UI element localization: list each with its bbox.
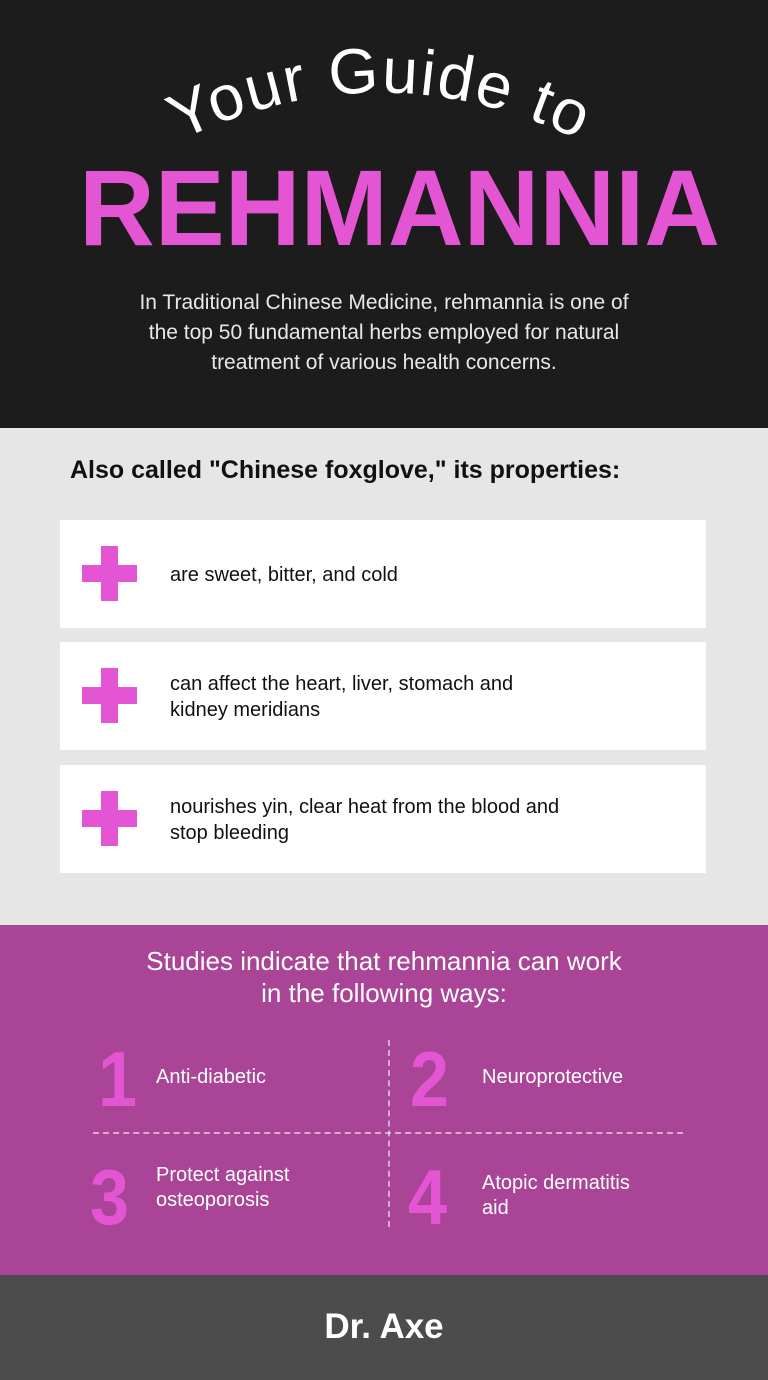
card 3: stop bleeding	[170, 822, 289, 844]
item 1	[98, 1035, 266, 1123]
item 2: Neuroprotective	[482, 1066, 623, 1088]
item 3: 3	[90, 1153, 129, 1241]
intro text: In Traditional Chinese Medicine, rehmannia is one of	[139, 291, 629, 314]
heading: Also called "Chinese foxglove," its properties:	[70, 456, 620, 484]
title	[79, 48, 720, 260]
header panel	[0, 0, 768, 428]
item 4: Atopic dermatitis	[482, 1172, 630, 1194]
intro text: the top 50 fundamental herbs employed for natural	[149, 321, 619, 344]
item 3: osteoporosis	[156, 1189, 269, 1211]
intro text: treatment of various health concerns.	[211, 351, 557, 374]
item 1: 1	[98, 1035, 137, 1123]
item 3: Protect against	[156, 1164, 289, 1186]
heading: in the following ways:	[261, 978, 507, 1008]
panel: properties	[0, 428, 768, 925]
heading: Studies indicate that rehmannia can work	[146, 946, 622, 976]
logo: Dr. Axe	[324, 1307, 444, 1346]
intro text	[139, 291, 629, 374]
item 2	[410, 1035, 623, 1123]
item 4	[408, 1153, 630, 1241]
item 3	[90, 1153, 290, 1241]
card 1	[60, 520, 706, 628]
card 2: can affect the heart, liver, stomach and	[170, 673, 513, 695]
item 4: aid	[482, 1197, 509, 1219]
card 3	[60, 765, 706, 873]
footer	[0, 1275, 768, 1380]
panel: studies	[0, 925, 768, 1275]
card 3: nourishes yin, clear heat from the blood and	[170, 796, 559, 818]
card 2	[60, 642, 706, 750]
card 2: kidney meridians	[170, 699, 320, 721]
card 1: are sweet, bitter, and cold	[170, 564, 398, 586]
title: Your Guide to	[164, 48, 586, 134]
item 4: 4	[408, 1153, 447, 1241]
item 2: 2	[410, 1035, 449, 1123]
heading	[146, 946, 622, 1008]
item 1: Anti-diabetic	[156, 1066, 266, 1088]
